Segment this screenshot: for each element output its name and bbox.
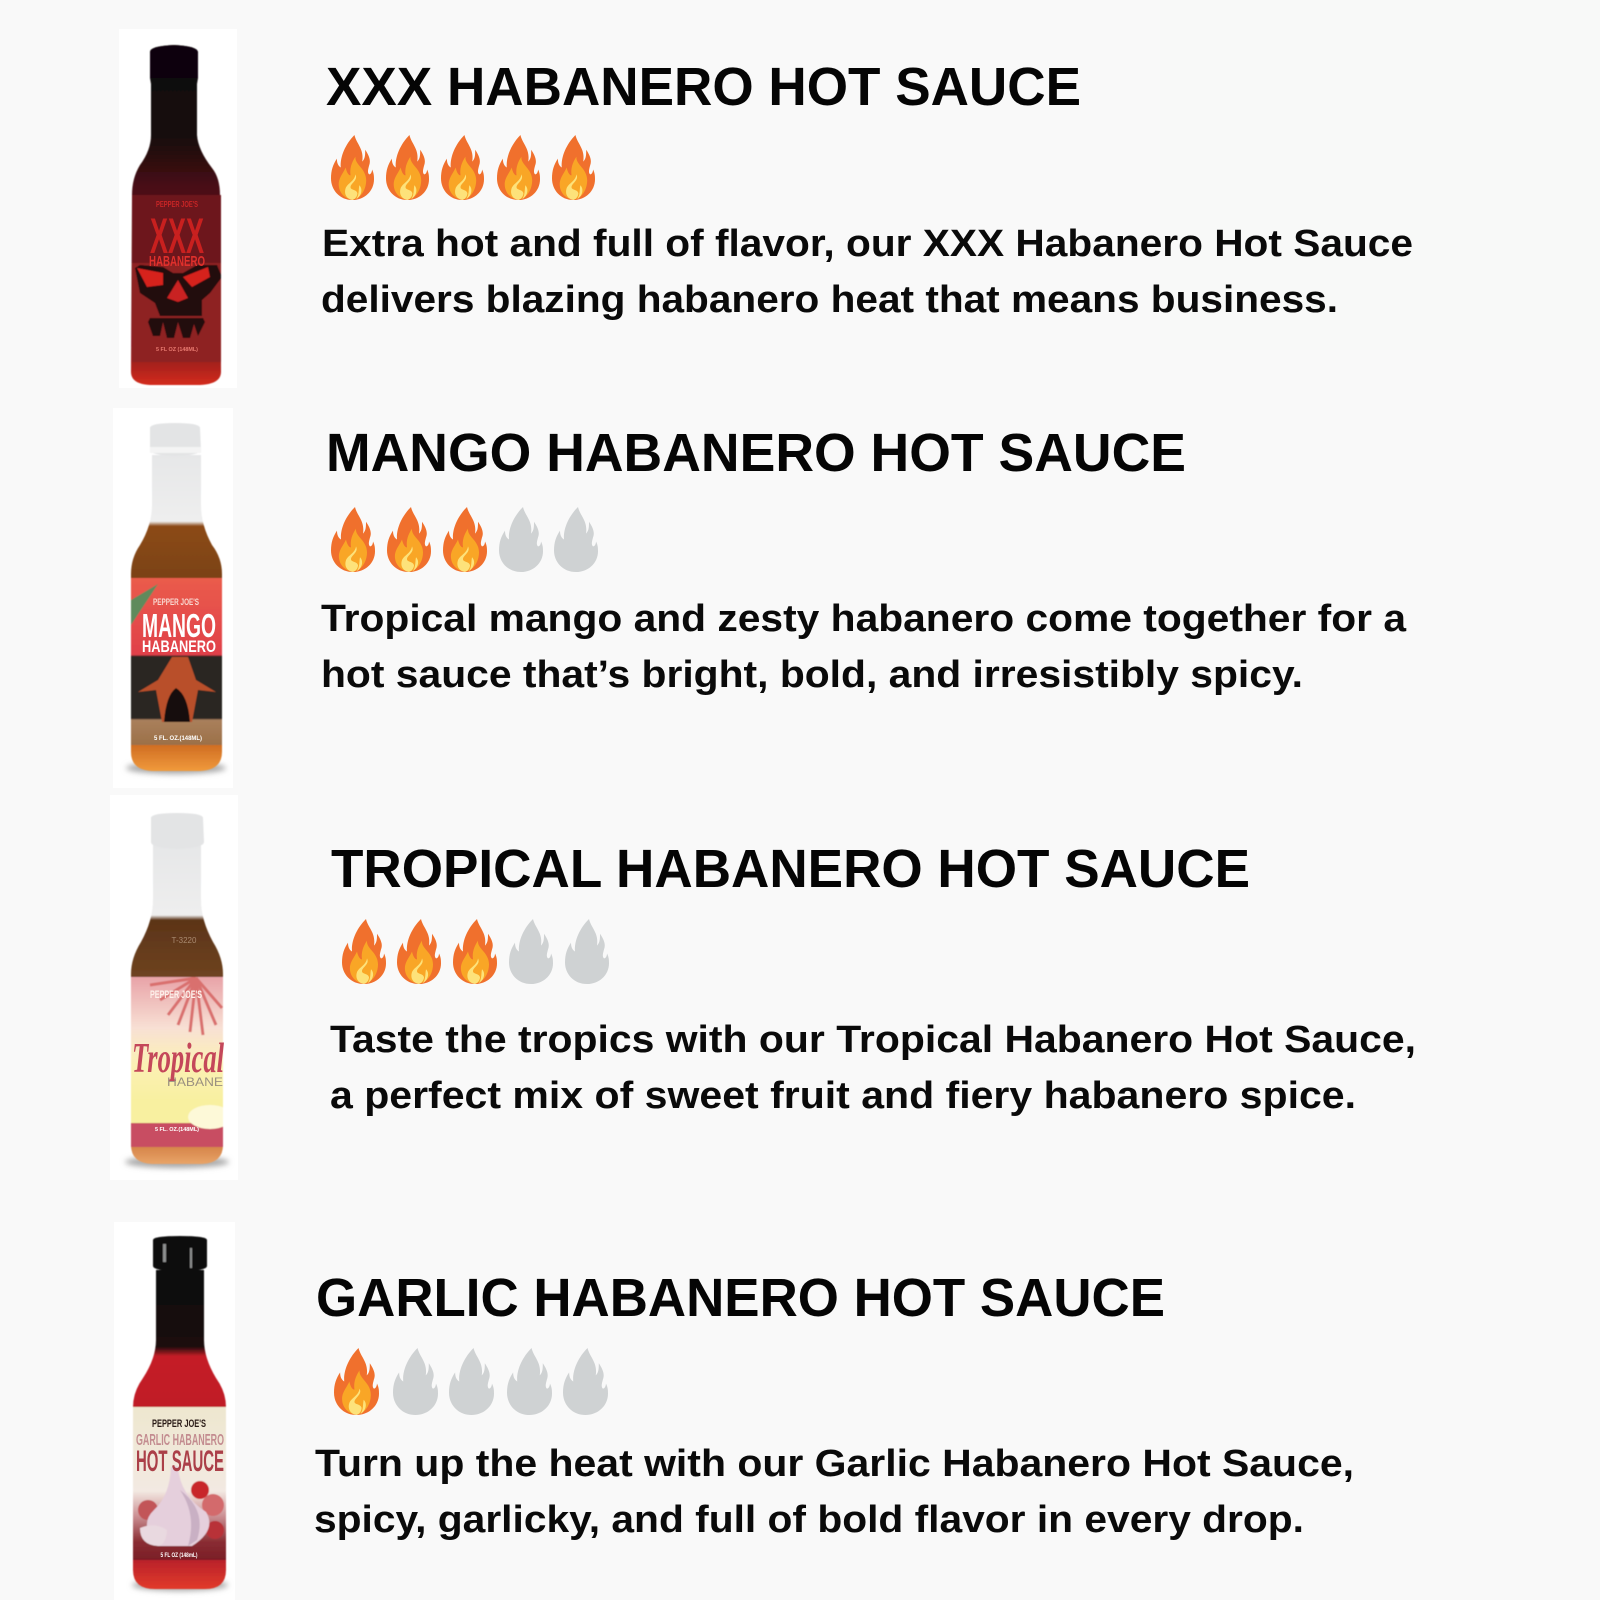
panel: XXX Habanero Hot Sauce [119, 29, 1413, 388]
bottle photo: Tropical Habanero: Tropical [132, 1036, 224, 1082]
title: Tropical Habanero: TROPICAL HABANERO HOT SAUCE [331, 839, 1250, 899]
bottle photo: Garlic Habanero: HOT SAUCE [136, 1445, 224, 1478]
bottle photo: XXX Habanero: 5 FL OZ (148ML) [156, 347, 198, 353]
heat rating: 1 of 5 [334, 1348, 608, 1415]
bottle photo: Garlic Habanero: PEPPER JOE'S [152, 1418, 206, 1430]
panel: Tropical Habanero Hot Sauce [110, 795, 1416, 1180]
heat rating: 3 of 5 [331, 507, 598, 572]
bottle photo: Mango Habanero: 5 FL. OZ.(148ML) [154, 736, 202, 742]
title: Mango Habanero: MANGO HABANERO HOT SAUCE [326, 423, 1186, 483]
bottle photo: XXX Habanero: HABANERO [149, 253, 205, 270]
description: Mango Habanero: hot sauce that’s bright, bold, and irresistibly spicy. [321, 654, 1303, 696]
bottle photo: Garlic Habanero [132, 1235, 228, 1594]
description: Tropical Habanero: a perfect mix of sweet fruit and fiery habanero spice. [330, 1075, 1356, 1117]
description: Garlic Habanero [314, 1443, 1354, 1541]
bottle photo: Mango Habanero: HABANERO [142, 637, 216, 656]
bottle photo: Tropical Habanero: PEPPER JOE'S [150, 989, 202, 1001]
description: XXX Habanero: delivers blazing habanero heat that means business. [321, 279, 1338, 321]
bottle photo: Tropical Habanero: 5 FL. OZ.(148ML) [155, 1127, 199, 1133]
description: XXX Habanero [321, 223, 1413, 321]
bottle photo: Garlic Habanero: 5 FL OZ (148mL) [160, 1553, 198, 1559]
bottle photo: XXX Habanero: PEPPER JOE'S [156, 200, 198, 209]
heat rating: 3 of 5 [342, 919, 609, 984]
description: XXX Habanero: Extra hot and full of flavor, our XXX Habanero Hot Sauce [322, 223, 1413, 265]
description: Tropical Habanero [330, 1019, 1416, 1117]
description: Garlic Habanero: Turn up the heat with our Garlic Habanero Hot Sauce, [315, 1443, 1354, 1485]
bottle photo: XXX Habanero [130, 44, 222, 386]
bottle photo: Tropical Habanero: T-3220 [172, 936, 197, 945]
panel: Garlic Habanero Hot Sauce [114, 1222, 1354, 1600]
title: XXX Habanero: XXX HABANERO HOT SAUCE [326, 57, 1081, 117]
description: Mango Habanero [321, 598, 1407, 696]
bottle photo: Mango Habanero: PEPPER JOE'S [153, 597, 199, 607]
panel: Mango Habanero Hot Sauce [113, 408, 1407, 788]
bottle photo: Tropical Habanero: HABANE [167, 1075, 223, 1089]
bottle photo: Tropical Habanero [124, 813, 230, 1171]
description: Garlic Habanero: spicy, garlicky, and full of bold flavor in every drop. [314, 1499, 1304, 1541]
description: Mango Habanero: Tropical mango and zesty habanero come together for a [321, 598, 1407, 640]
description: Tropical Habanero: Taste the tropics with our Tropical Habanero Hot Sauce, [330, 1019, 1416, 1061]
bottle photo: Mango Habanero [126, 423, 226, 777]
title: Garlic Habanero: GARLIC HABANERO HOT SAUCE [316, 1268, 1165, 1328]
bottle photo: Mango Habanero: MANGO [142, 607, 216, 644]
bottle photo: Garlic Habanero: GARLIC HABANERO [136, 1432, 224, 1449]
bottle photo: XXX Habanero: XXX [150, 208, 204, 264]
heat rating: 5 of 5 [331, 135, 595, 200]
